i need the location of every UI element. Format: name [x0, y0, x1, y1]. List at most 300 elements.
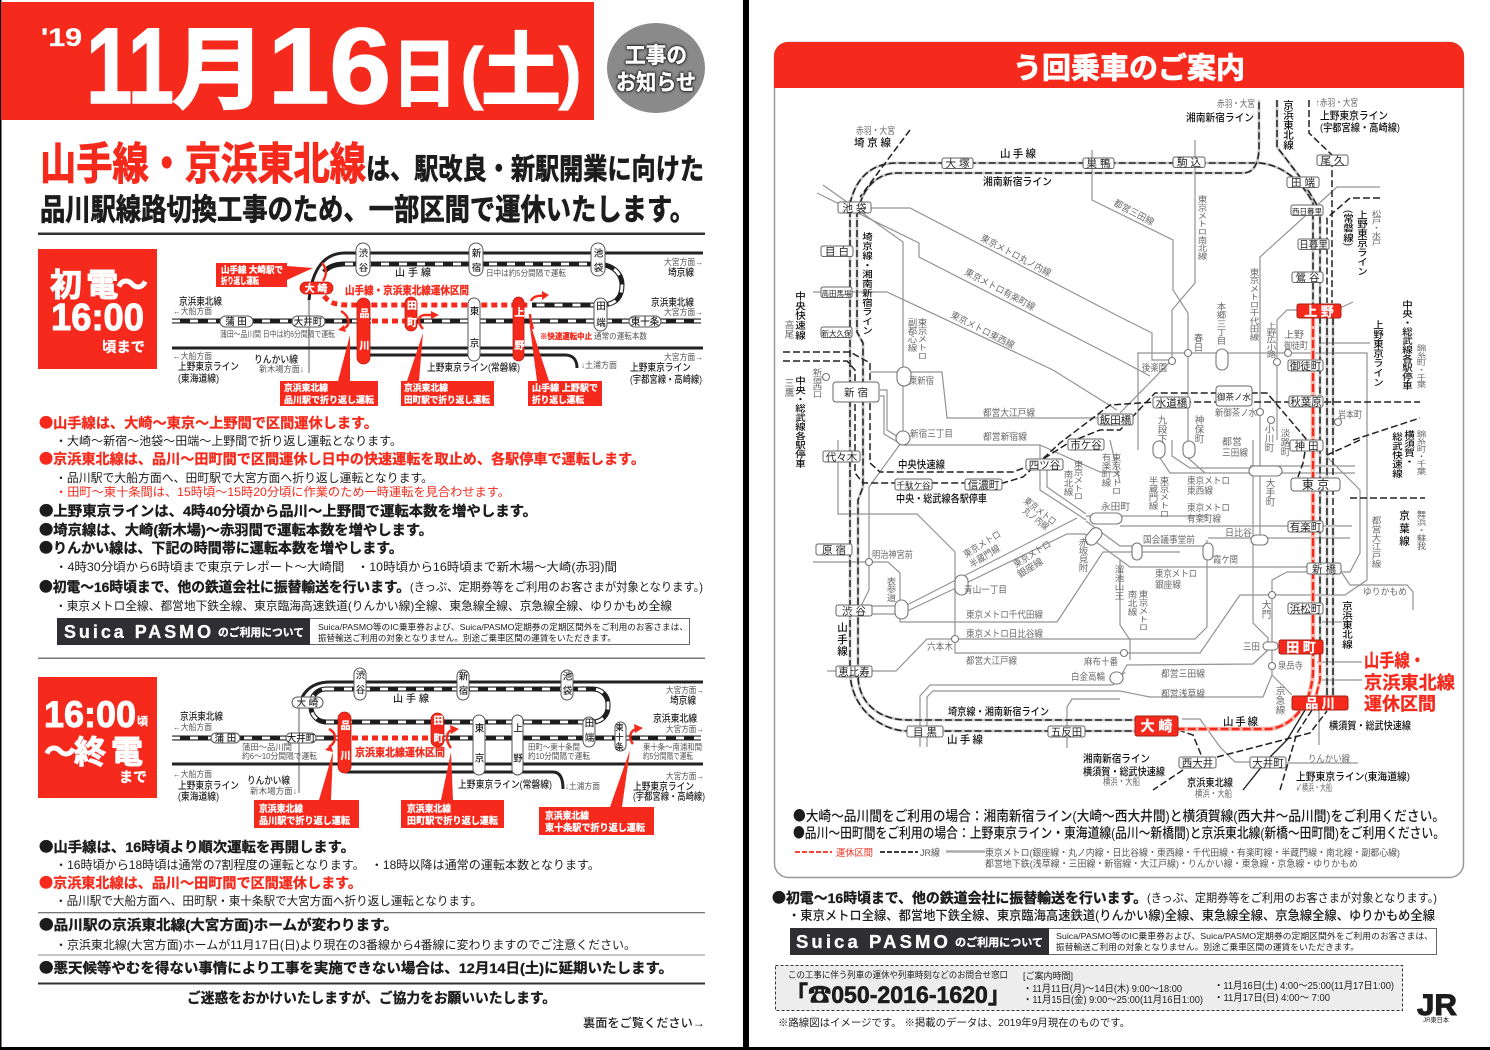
map: subway and direction labels: 半蔵門線	[967, 542, 1003, 571]
callout: Keihin-Tohoku turn back at Higashi-Jujo: 京浜東北線	[545, 810, 589, 822]
text block: transfer transport notice: ●初電～16時頃まで、他の鉄道会社に振替輸送を行います。	[772, 888, 1147, 908]
badge: notice of works	[607, 23, 705, 113]
map: subway and direction labels: 都営大江戸線	[983, 407, 1035, 419]
notice box: Suica PASMO (reverse side): Suica/PASMO等のIC乗車券および、Suica/PASMO定期券の定期区間外をご利用のお客さまは、	[1056, 931, 1433, 941]
map: subway and direction labels: 新御茶ノ水	[1215, 407, 1257, 419]
title banner: )	[558, 33, 582, 111]
diagram: first train to 16:00: 京浜東北線	[179, 295, 222, 308]
map: station boxes: 新 橋	[1312, 562, 1336, 576]
map: station boxes: 東 京	[1302, 478, 1329, 492]
station pills	[211, 668, 626, 775]
station pills: 東	[472, 722, 484, 738]
station pills: 池袋	[560, 670, 572, 700]
text block: first-train notices: ・大崎～新宿～池袋～田端～上野間で折り返し運転となります。	[55, 433, 402, 448]
map: subway and direction labels: 泉岳寺	[1278, 660, 1303, 672]
text block: evening notices: ●品川駅の京浜東北線(大宮方面)ホームが変わります。	[39, 915, 398, 935]
text block: detour guidance	[793, 806, 1445, 843]
map: subway and direction labels: 錦糸町・千葉	[1414, 429, 1426, 476]
diagram: first train to 16:00: ↓土浦方面	[581, 360, 617, 370]
map: subway and direction labels: 南北線	[1126, 589, 1137, 617]
map: JR line labels: 上野東京ライン	[1320, 109, 1388, 122]
map: subway and direction labels: 東京メトロ日比谷線	[966, 628, 1043, 640]
map: subway and direction labels: 大門	[1260, 599, 1271, 620]
diagram: 16:00 to last train: りんかい線	[247, 774, 290, 787]
diagram: 16:00 to last train: ↓土浦方面	[565, 781, 600, 791]
station pills: 田町	[431, 715, 443, 751]
text block: detour guidance: ●大崎～品川間をご利用の場合：湘南新宿ライン(大崎～西大井間)と横須賀線(西大井～品川間)をご利用ください。	[793, 806, 1445, 826]
title banner	[1, 2, 594, 126]
map legend: JR線	[920, 847, 940, 859]
panel: first train to 16:00 time badge	[38, 249, 157, 369]
callout: Keihin-Tohoku turn back at Tamachi	[401, 333, 494, 406]
diagram: first train to 16:00: 大宮方面→	[664, 257, 703, 267]
map: subway and direction labels: 上野	[1284, 330, 1305, 341]
text block: evening notices: 裏面をご覧ください→	[583, 1015, 705, 1030]
map: JR line labels: 京葉線	[1398, 510, 1410, 547]
map: subway and direction labels: 明治神宮前	[872, 549, 913, 561]
turn-back arrows	[325, 724, 643, 752]
map: station boxes: 信濃町	[968, 478, 1000, 492]
map: subway and direction labels: 都営三田線	[1161, 668, 1205, 680]
badge: notice of works: お知らせ	[616, 70, 696, 95]
map: subway and direction labels: 東京メトロ	[1187, 502, 1230, 514]
map: subway and direction labels: 横浜・大船	[1195, 788, 1232, 800]
badge: notice of works: 工事の	[625, 43, 687, 68]
station pills: 池袋	[592, 247, 603, 277]
map: subway and direction labels: 錦糸町・千葉	[1414, 344, 1426, 389]
panel: 16:00 to last train time badge: 16:00	[44, 694, 136, 735]
notice box: Suica PASMO: のご利用について	[218, 625, 304, 639]
text block: first-train notices: ●初電～16時頃まで、他の鉄道会社に振替輸送を行います。	[39, 577, 410, 597]
map: subway and direction labels: 東京メトロ	[1155, 568, 1197, 580]
diagram: first train to 16:00: 上野東京ライン(常磐線)	[427, 361, 520, 374]
panel: first train to 16:00 time badge: 初 電～	[50, 267, 148, 303]
notice box: Suica PASMO (reverse side): のご利用について	[955, 935, 1043, 949]
map: station boxes: 西日暮里	[1292, 206, 1322, 216]
callout: Keihin-Tohoku turn back at Shinagawa: 京浜東北線	[284, 382, 328, 393]
map: JR line labels: (常磐線)	[1342, 210, 1354, 246]
map: subway and direction labels: 都営大江戸線	[966, 655, 1017, 667]
map: subway and direction labels: 京急線	[1274, 686, 1285, 715]
notice box: Suica PASMO: Suica PASMO	[64, 622, 214, 642]
map: subway and direction labels: 小川町	[1262, 424, 1274, 452]
map: subway and direction labels: 新宿三丁目	[910, 428, 953, 440]
diagram: first train to 16:00: (宇都宮線・高崎線)	[630, 373, 702, 386]
map: subway and direction labels: 東西線	[1187, 485, 1213, 497]
station pills: 新宿	[470, 247, 481, 277]
callout: Yamanote turn back at Ueno: 山手線 上野駅で	[532, 382, 598, 393]
map: subway and direction labels: 銀座線	[1155, 579, 1181, 591]
map: JR line labels: 湘南新宿ライン	[983, 175, 1052, 188]
diagram: 16:00 to last train: 約6～10分間隔で運転	[242, 751, 317, 761]
map: station boxes: 日暮里	[1299, 239, 1328, 251]
text block: evening notices: ・16時頃から18時頃は通常の7割程度の運転となります。 ・18時以降は通常の運転本数となります。	[55, 857, 600, 872]
diagram: first train to 16:00: 上野東京ライン	[178, 360, 239, 373]
callout: Keihin-Tohoku turn back at Higashi-Jujo	[539, 750, 654, 835]
callout: Yamanote turn back at Osaki	[216, 263, 313, 287]
text block: evening notices: ●京浜東北線は、品川～田町間で区間運休します。	[39, 873, 362, 893]
map: JR line labels: 上野東京ライン	[1356, 210, 1368, 276]
map: JR line labels: 中央快速線	[794, 290, 806, 341]
map: JR line labels: 山手線	[1000, 147, 1036, 160]
map: JR line labels: 上野東京ライン	[1372, 320, 1384, 387]
map label: suspended section: 運休区間	[1364, 694, 1436, 714]
station pills: 田端	[594, 301, 606, 334]
map: JR line labels: 埼京線	[854, 136, 892, 149]
map: station boxes: 市ケ谷	[1070, 438, 1102, 452]
notice box: Suica PASMO (reverse side): Suica PASMO	[796, 932, 951, 952]
panel: first train to 16:00 time badge: 頃まで	[102, 339, 145, 355]
station pills: 田端	[582, 718, 594, 747]
map: station boxes: 神 田	[1295, 440, 1318, 452]
map: subway and direction labels: 赤羽・大宮	[856, 125, 895, 137]
diagram: first train to 16:00: ※快速運転中止	[540, 331, 592, 341]
diagram: first train to 16:00: 新木場方面↓	[259, 364, 304, 374]
station pills: 京	[468, 338, 479, 352]
map: subway and direction labels: ↑赤羽・大宮	[1316, 97, 1358, 109]
station pills: 渋谷	[356, 247, 368, 277]
logo: JR East: JR東日本	[1423, 1015, 1449, 1024]
text block: first-train notices: ●上野東京ラインは、4時40分頃から品川～上野間で運転本数を増やします。	[39, 501, 537, 521]
map: JR line labels: 埼京線・湘南新宿ライン	[861, 231, 873, 335]
map: subway and direction labels: 三鷹	[782, 378, 794, 398]
map: JR line labels: 京浜東北線	[1187, 776, 1233, 789]
notice box: Suica PASMO (reverse side): 振替輸送ご利用の対象となりません。別途ご乗車区間の運賃をいただきます。	[1056, 942, 1359, 952]
panel: detour map frame: う回乗車のご案内	[1013, 51, 1245, 85]
headline: 山手線・京浜東北線	[40, 140, 366, 189]
map: station boxes: 大 崎	[1141, 718, 1172, 734]
map: subway and direction labels: 南北線	[1062, 469, 1073, 497]
station pills: 蒲 田	[215, 732, 236, 744]
map: subway and direction labels: 神保町	[1192, 414, 1204, 444]
text block: first-train notices: ●りんかい線は、下記の時間帯に運転本数を増やします。	[39, 538, 403, 558]
title banner: 月	[172, 21, 266, 121]
map: subway and direction labels: 御徒町	[1284, 340, 1308, 352]
map: station boxes: 池 袋	[843, 202, 867, 214]
map: station boxes: 代々木	[826, 452, 858, 464]
diagram: 16:00 to last train: 上野東京ライン(常磐線)	[458, 778, 552, 791]
station pills: 品	[357, 308, 369, 318]
notice box: Suica PASMO (reverse side)	[790, 928, 1436, 955]
map: subway and direction labels: 半蔵門線	[1146, 475, 1158, 511]
map: JR line labels: (宇都宮線・高崎線)	[1320, 121, 1400, 134]
map: subway and direction labels: 東京メトロ	[1011, 538, 1053, 571]
map: subway and direction labels: 永田町	[1101, 501, 1130, 513]
map legend: 都営地下鉄(浅草線・三田線・新宿線・大江戸線)・りんかい線・東急線・京急線・ゆりかもめ	[985, 858, 1358, 870]
text block: first-train notices: ・品川駅で大船方面へ、田町駅で大宮方面へ折り返し運転となります。	[55, 470, 433, 485]
map: station boxes: 原 宿	[822, 544, 846, 556]
map: JR line labels: 山手線	[1223, 715, 1258, 728]
text block: transfer transport notice: ・東京メトロ全線、都営地下鉄全線、東京臨海高速鉄道(りんかい線)全線、東急線全線、京急線全線、ゆりかもめ全線	[788, 908, 1435, 923]
title banner: 日	[392, 33, 457, 116]
map: subway and direction labels: 淡路町	[1278, 428, 1290, 456]
map label: suspended section: 京浜東北線	[1364, 673, 1455, 693]
callout: Keihin-Tohoku turn back at Higashi-Jujo: 東十条駅で折り返し運転	[545, 822, 645, 834]
map: subway and direction labels: りんかい線	[1308, 753, 1350, 765]
text block: first-train notices: ●山手線は、大崎～東京～上野間で区間運休します。	[39, 413, 378, 433]
map: JR line labels: 中央・総武線各駅停車	[794, 375, 806, 469]
map: JR line labels: 京浜東北線	[1341, 601, 1353, 650]
map: subway and direction labels: 東京メトロ	[1158, 475, 1169, 518]
map: subway and direction labels: 三田線	[1222, 447, 1248, 459]
map: subway and direction labels: 麻布十番	[1084, 656, 1118, 668]
turn-back arrows	[322, 263, 549, 332]
map: subway and direction labels: ↙横浜・大船	[1296, 782, 1332, 794]
map: station boxes: 渋 谷	[842, 604, 866, 618]
callout: Keihin-Tohoku turn back at Tamachi: 京浜東北線	[404, 382, 448, 393]
map: JR line labels	[794, 100, 1415, 789]
callout: Yamanote turn back at Ueno: 折り返し運転	[532, 394, 584, 405]
map: JR line labels: 横須賀・総武快速線	[1083, 765, 1165, 778]
map: subway and direction labels: 都営	[1222, 436, 1242, 448]
map: station boxes: 大 塚	[946, 157, 970, 170]
map: JR line labels: 中央・総武線各駅停車	[1401, 299, 1413, 391]
diagram: first train to 16:00: 埼京線	[668, 266, 694, 279]
diagram: first train to 16:00: 上野東京ライン	[630, 361, 691, 374]
diagram: 16:00 to last train: 東十条～南浦和間	[643, 742, 702, 752]
map: subway and direction labels: 都営浅草線	[1161, 688, 1205, 700]
diagram: 16:00 to last train: 大宮方面→	[666, 685, 704, 695]
callout: Keihin-Tohoku turn back at Tamachi: 田町駅で折り返し運転	[404, 394, 490, 405]
notice box: Suica PASMO: 振替輸送ご利用の対象となりません。別途ご乗車区間の運賃をいただきます。	[318, 633, 616, 643]
map: station boxes: 上 野	[1304, 304, 1334, 319]
map: subway and direction labels: 赤坂見附	[1076, 538, 1088, 573]
text block: first-train notices: ・4時30分頃から6時頃まで東京テレポート～大崎間 ・10時頃から16時頃まで新木場～大崎(赤羽)間	[55, 560, 617, 574]
callout: Keihin-Tohoku turn back at Tamachi (evening): 田町駅で折り返し運転	[407, 815, 498, 827]
map: station boxes: 新 宿	[844, 386, 868, 399]
diagram: first train to 16:00	[172, 243, 703, 386]
diagram: 16:00 to last train: 京浜東北線運休区間	[355, 745, 445, 759]
map: subway and direction labels: ゆりかもめ	[1363, 587, 1407, 598]
map: station boxes: 飯田橋	[1100, 414, 1132, 426]
map: JR line labels: 湘南新宿ライン	[1186, 111, 1254, 124]
text block: first-train notices: ・東京メトロ全線、都営地下鉄全線、東京臨海高速鉄道(りんかい線)全線、東急線全線、京急線全線、ゆりかもめ全線	[55, 598, 672, 613]
text block: evening notices: ●悪天候等やむを得ない事情により工事を実施できない場合は、12月14日(土)に延期いたします。	[39, 958, 673, 978]
station pills: 川	[357, 340, 369, 350]
map: station boxes: 水道橋	[1156, 396, 1188, 410]
map: station boxes: 新大久保	[822, 328, 852, 338]
diagram: first train to 16:00: 通常の運転本数	[594, 331, 647, 341]
map: subway and direction labels: 東京メトロ	[1187, 475, 1230, 487]
panel: 16:00 to last train time badge	[38, 677, 157, 798]
map: station boxes: 尾 久	[1321, 155, 1345, 167]
map: JR line labels: 山手線	[836, 622, 848, 657]
callout: Keihin-Tohoku turn back at Shinagawa (evening): 品川駅で折り返し運転	[259, 815, 350, 827]
map: station boxes: 品 川	[1305, 696, 1335, 711]
logo: JR East: JR	[1417, 989, 1457, 1022]
callout: Keihin-Tohoku turn back at Shinagawa (evening): 京浜東北線	[259, 803, 303, 815]
map: subway and direction labels: 舞浜・蘇我	[1414, 509, 1426, 550]
map: station boxes: 目 白	[825, 245, 849, 258]
map: station boxes: 浜松町	[1290, 602, 1322, 616]
diagram: 16:00 to last train: 京浜東北線	[653, 712, 697, 725]
station pills: 大井町	[287, 732, 316, 744]
map legend	[795, 847, 1400, 870]
title banner: 土	[481, 27, 561, 116]
footnote: ※路線図はイメージです。 ※掲載のデータは、2019年9月現在のものです。	[778, 1016, 1130, 1029]
contact box: ・11月17日(日) 4:00～ 7:00	[1214, 992, 1330, 1004]
station pills: 田町	[404, 300, 416, 334]
text block: first-train notices	[39, 413, 703, 613]
map: station boxes: 西大井	[1182, 756, 1213, 770]
station pills: 東十条	[631, 316, 660, 328]
map: subway and direction labels: 松戸・水戸	[1370, 210, 1381, 247]
map: subway and direction labels: 横浜・大船	[1103, 776, 1140, 788]
callout: Yamanote turn back at Ueno	[528, 320, 602, 406]
panel: 16:00 to last train time badge: 頃	[137, 714, 148, 728]
text block: evening notices: ・京浜東北線(大宮方面)ホームが11月17日(日)より現在の3番線から4番線に変わりますのでご注意ください。	[55, 937, 636, 952]
callout: Keihin-Tohoku turn back at Tamachi (evening)	[401, 752, 504, 828]
map: JR line labels: 山手線	[947, 733, 984, 746]
map: subway and direction labels: 溜池山王	[1112, 564, 1124, 600]
diagram: 16:00 to last train: 約10分間隔で運転	[528, 751, 590, 761]
title banner: 16	[268, 5, 391, 126]
diagram: 16:00 to last train: ←大船方面	[173, 769, 212, 779]
map: station boxes: 五反田	[1051, 726, 1082, 738]
map: subway and direction labels: 新宿西口	[810, 368, 822, 398]
map legend: 東京メトロ(銀座線・丸ノ内線・日比谷線・東西線・千代田線・有楽町線・半蔵門線・南北線・副都心線)	[985, 847, 1400, 859]
map: subway and direction labels: 東京メトロ	[1136, 589, 1148, 631]
map: subway and direction labels: 三田	[1243, 642, 1260, 653]
panel: first train to 16:00 time badge: 16:00	[51, 297, 144, 339]
station pills: 新宿	[456, 670, 468, 700]
station pills: 大 崎	[305, 282, 327, 295]
text block: evening notices: ご迷惑をおかけいたしますが、ご協力をお願いいたします。	[187, 990, 556, 1006]
diagram: 16:00 to last train: 約5分間隔で運転	[643, 751, 693, 761]
notice box: Suica PASMO: Suica/PASMO等のIC乗車券および、Suica/PASMO定期券の定期区間外をご利用のお客さまは、	[318, 622, 688, 632]
map: subway and direction labels: 東京メトロ	[1072, 459, 1083, 500]
map: subway and direction labels: 有楽町線	[1187, 513, 1221, 525]
map: subway and direction labels: 六本木	[927, 641, 953, 653]
diagram: first train to 16:00: 京浜東北線	[651, 296, 694, 309]
diagram: 16:00 to last train: 埼京線	[670, 694, 696, 707]
diagram: 16:00 to last train	[172, 668, 705, 803]
callout: Yamanote turn back at Osaki: 折り返し運転	[221, 275, 259, 286]
diagram: 16:00 to last train: 京浜東北線	[180, 710, 223, 723]
diagram: 16:00 to last train: 上野東京ライン	[178, 779, 239, 792]
map: station boxes: 田 端	[1291, 176, 1315, 189]
text block: transfer transport notice: (きっぷ、定期券等をご利用のお客さまが対象となります。)	[1147, 890, 1437, 905]
headline: は、駅改良・新駅開業に向けた	[366, 153, 704, 186]
map: station boxes: 千駄ケ谷	[896, 480, 931, 490]
map: station boxes: 目 黒	[913, 726, 937, 738]
diagram: 16:00 to last train: (東海道線)	[178, 790, 219, 803]
map: subway and direction labels: 東京メトロ	[916, 317, 927, 360]
map: station boxes: 大井町	[1252, 756, 1284, 770]
station pills: 野	[512, 339, 524, 350]
panel: detour map frame	[774, 42, 1464, 878]
map: station boxes: 有楽町	[1290, 520, 1322, 534]
map: JR line labels: 中央・総武線各駅停車	[896, 492, 987, 505]
callout: Keihin-Tohoku turn back at Tamachi (evening): 京浜東北線	[407, 803, 451, 815]
diagram: 16:00 to last train: 大宮方面→	[666, 724, 704, 734]
station pills: 蒲 田	[225, 316, 247, 328]
map: JR line labels: 上野東京ライン(東海道線)	[1296, 770, 1410, 783]
map: station boxes: 秋葉原	[1290, 396, 1322, 408]
map label: suspended section	[1364, 651, 1455, 714]
map: station boxes: 御茶ノ水	[1217, 392, 1251, 402]
diagram: first train to 16:00: 大宮方面→	[664, 352, 703, 362]
diagram: first train to 16:00: 山手線	[395, 266, 434, 279]
map: subway and direction labels: 東京メトロ	[1110, 452, 1121, 495]
contact box: ・11月16日(土) 4:00～25:00(11月17日1:00)	[1214, 979, 1394, 992]
station pills: 川	[338, 750, 350, 760]
callout: Keihin-Tohoku turn back at Shinagawa	[280, 335, 378, 406]
map: station boxes: 駒 込	[1177, 157, 1201, 169]
map: subway and direction labels: 丸ノ内線	[1020, 505, 1051, 533]
callout: Keihin-Tohoku turn back at Shinagawa: 品川駅で折り返し運転	[284, 394, 374, 405]
diagram: first train to 16:00: 山手線・京浜東北線運休区間	[345, 283, 469, 297]
map: subway and direction labels: 都営三田線	[1112, 197, 1156, 229]
map: station boxes	[816, 155, 1348, 770]
diagram: 16:00 to last train: (宇都宮線・高崎線)	[633, 790, 705, 803]
text block: first-train notices: ●埼京線は、大崎(新木場)～赤羽間で運転本数を増やします。	[39, 520, 433, 540]
contact box: ・11月11日(月)～14日(木) 9:00～18:00	[1023, 983, 1182, 995]
diagram: 16:00 to last train: 田町～東十条間	[528, 742, 580, 752]
station pills	[220, 243, 661, 364]
station pills: 京	[472, 753, 484, 768]
map label: suspended section: 山手線・	[1364, 651, 1425, 671]
text block: evening notices	[39, 837, 705, 1030]
map: subway and direction labels: 白金高輪	[1071, 671, 1105, 683]
station pills: 品	[338, 720, 350, 730]
station pills: 上	[512, 306, 524, 317]
map: subway and direction labels: 東京メトロ	[1021, 495, 1058, 528]
map: subway and direction labels: 東京メトロ千代田線	[1248, 267, 1259, 342]
map: subway and direction labels: 東京メトロ南北線	[1196, 194, 1207, 261]
map: subway and direction labels: 東新宿	[909, 375, 934, 387]
text block: first-train notices: ・田町～東十条間は、15時頃～15時20分頃に作業のため一時運転を見合わせます。	[55, 485, 510, 499]
contact box: [ご案内時間]	[1023, 970, 1073, 981]
map: subway and direction labels: 東京メトロ東西線	[949, 309, 1017, 352]
station pills: 大井町	[294, 316, 323, 328]
diagram: 16:00 to last train: 山手線	[393, 692, 432, 705]
map: station boxes: 巣 鴨	[1087, 157, 1111, 170]
title banner: (	[460, 33, 485, 111]
text block: first-train notices: ●京浜東北線は、品川～田町間で区間運休し日中の快速運転を取止め、各駅停車で運転します。	[39, 449, 645, 469]
map: subway and direction labels: 表参道	[884, 577, 896, 603]
map: subway and direction labels: 九段下	[1156, 414, 1167, 444]
map: subway lines	[813, 140, 1413, 763]
map: subway and direction labels: 岩本町	[1338, 409, 1362, 421]
diagram: 16:00 to last train: 大宮方面→	[666, 771, 704, 781]
map: JR line labels: 横須賀・	[1403, 429, 1415, 466]
map: station boxes: 四ツ谷	[1029, 460, 1061, 472]
headline: 品川駅線路切換工事のため、一部区間で運休いたします。	[40, 194, 695, 227]
panel: 16:00 to last train time badge: まで	[119, 769, 147, 785]
map: subway and direction labels: 本郷三丁目	[1214, 301, 1226, 345]
diagram: first train to 16:00: (東海道線)	[178, 372, 219, 385]
station pills: 渋谷	[354, 669, 365, 699]
diagram: first train to 16:00: りんかい線	[254, 353, 298, 366]
map: small subway interchange nodes	[822, 349, 1342, 684]
diagram: first train to 16:00: 日中は約5分間隔で運転	[486, 268, 566, 278]
diagram: 16:00 to last train: 上野東京ライン	[633, 780, 694, 793]
map: subway and direction labels: 後楽園	[1142, 362, 1167, 374]
station pills: 野	[511, 753, 523, 768]
callout: Yamanote turn back at Osaki: 山手線 大崎駅で	[221, 264, 283, 275]
callout: Keihin-Tohoku turn back at Shinagawa (evening)	[254, 752, 359, 828]
text block: transfer transport notice	[772, 888, 1437, 923]
headline	[40, 140, 704, 227]
map: subway and direction labels: 都営新宿線	[983, 431, 1027, 443]
map: subway and direction labels: 有楽町線	[1100, 452, 1111, 488]
map: subway and direction labels: 赤羽・大宮	[1217, 98, 1255, 110]
diagram: 16:00 to last train: 蒲田～品川間	[242, 742, 292, 752]
map: JR line labels: 埼京線・湘南新宿ライン	[948, 705, 1049, 718]
diagram: first train to 16:00: 大宮方面→	[664, 307, 703, 317]
map: subway and direction labels: 春日	[1192, 332, 1203, 352]
